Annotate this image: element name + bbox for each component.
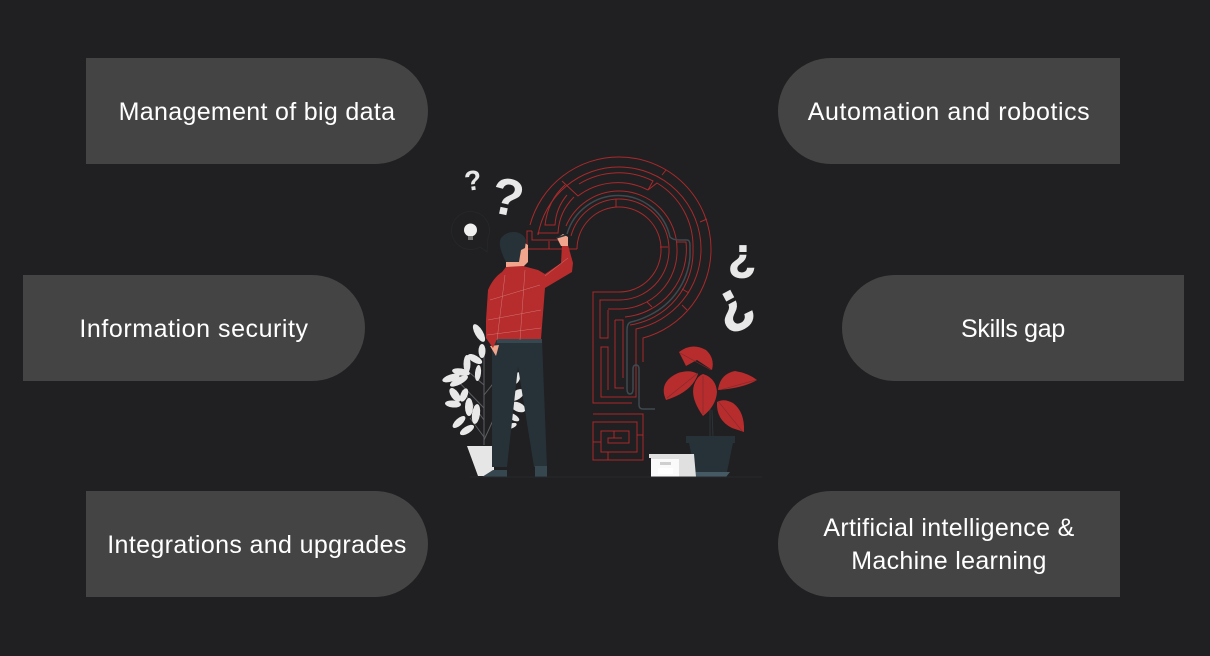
panel: Artificial intelligence and machine learning bbox=[778, 491, 1120, 597]
panel: Artificial intelligence and machine learning: Artificial intelligence & bbox=[823, 514, 1075, 542]
icon: maze question mark bbox=[527, 157, 711, 460]
panel: Automation and robotics bbox=[778, 58, 1120, 164]
panel: Integrations and upgrades bbox=[86, 491, 428, 597]
icon: inverted question mark upper: ¿ bbox=[728, 228, 756, 280]
panel: Automation and robotics: Automation and robotics bbox=[808, 98, 1090, 126]
panel: Information security: Information security bbox=[79, 314, 309, 342]
icon: large question mark: ? bbox=[486, 166, 529, 230]
ground line bbox=[470, 476, 762, 478]
panel: Integrations and upgrades: Integrations and upgrades bbox=[107, 530, 407, 558]
panel: Information security bbox=[23, 275, 365, 381]
panel: Skills gap bbox=[842, 275, 1184, 381]
white plant bbox=[441, 322, 527, 476]
white box bbox=[649, 454, 696, 477]
person bbox=[482, 232, 573, 477]
panel: Management of big data bbox=[86, 58, 428, 164]
icon: lightbulb speech bubble bbox=[452, 212, 490, 252]
panel: Management of big data: Management of big data bbox=[119, 98, 395, 126]
panel: Skills gap: Skills gap bbox=[961, 314, 1065, 342]
icon: inverted question mark lower: ¿ bbox=[700, 266, 762, 340]
red plant bbox=[664, 346, 757, 477]
icon: grey solution path bbox=[567, 195, 690, 409]
icon: small question mark: ? bbox=[462, 164, 484, 197]
panel: Artificial intelligence and machine learning: Machine learning bbox=[851, 547, 1047, 575]
